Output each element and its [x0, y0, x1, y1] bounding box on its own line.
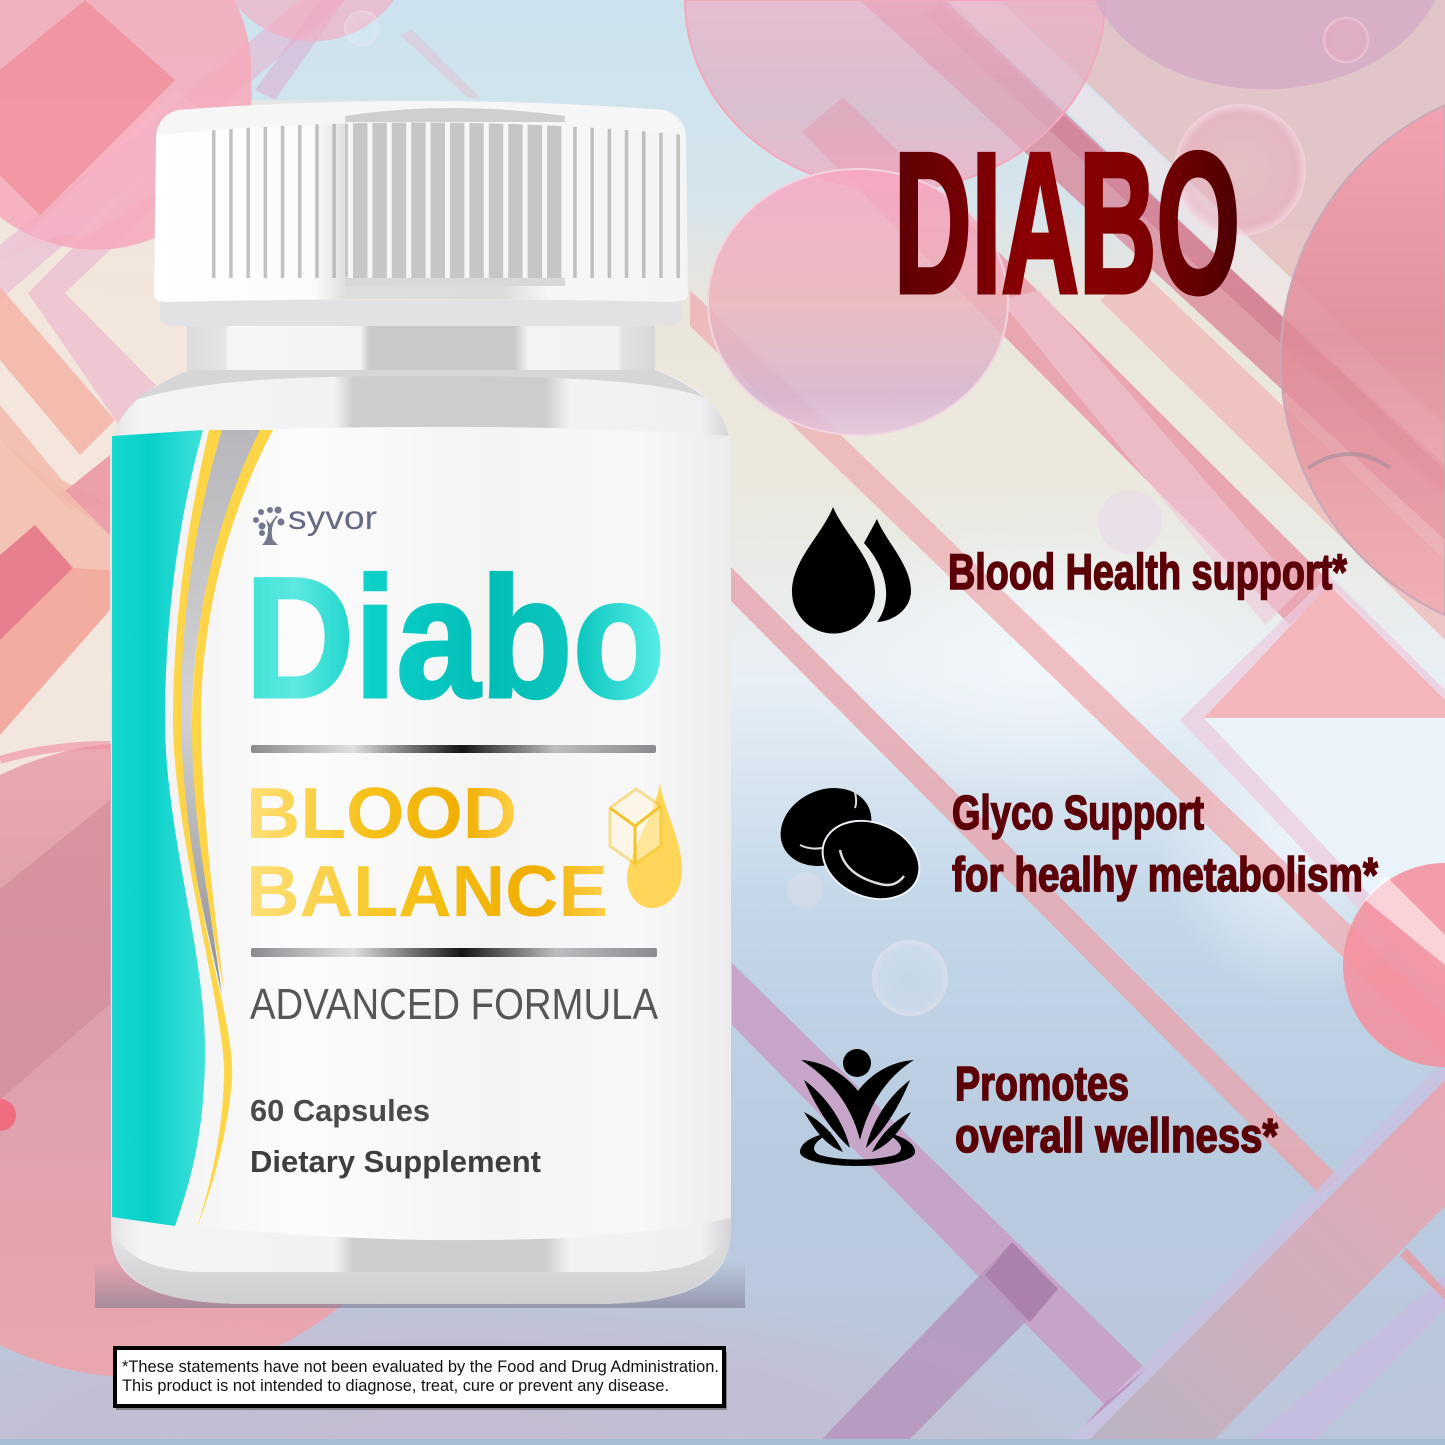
- product name: Diabo: [245, 542, 665, 734]
- product label: [112, 427, 731, 1240]
- top divider: [251, 745, 656, 753]
- bottom divider: [251, 948, 657, 957]
- disclaimer box: *These statements have not been evaluated by the Food and Drug Administration.: [122, 1358, 719, 1376]
- feature: glyco support: Glyco Support: [952, 787, 1204, 840]
- bottle body: [111, 365, 731, 1304]
- supplement type: Dietary Supplement: [250, 1144, 541, 1179]
- product bottle: [111, 101, 731, 1304]
- feature: wellness: [955, 1058, 1278, 1163]
- feature: wellness: Promotes: [955, 1058, 1129, 1111]
- bottle neck: [187, 310, 655, 370]
- icon: wellness figure: [800, 1049, 915, 1166]
- blood balance heading: BLOOD: [246, 774, 517, 854]
- brand logo: syvor: [288, 499, 377, 536]
- bottle cap: [154, 101, 688, 302]
- label teal wave: [112, 430, 205, 1226]
- subtitle: ADVANCED FORMULA: [250, 980, 659, 1029]
- disclaimer box: [115, 1348, 727, 1410]
- disclaimer box: This product is not intended to diagnose, treat, cure or prevent any disease.: [122, 1377, 669, 1395]
- label silver stripe: [180, 430, 262, 995]
- blood balance heading: BALANCE: [246, 852, 608, 932]
- bottle shadow: [95, 1262, 745, 1308]
- icon: sugar cube and drop: [610, 783, 682, 908]
- blood balance heading: [246, 774, 608, 932]
- brand logo: [253, 499, 377, 545]
- feature: wellness: overall wellness*: [955, 1110, 1278, 1163]
- bottle collar: [160, 300, 682, 326]
- icon: blood cells: [768, 774, 931, 913]
- icon: blood drops: [792, 507, 911, 633]
- feature: glyco support: [952, 787, 1378, 902]
- bottle base shading: [111, 1225, 731, 1304]
- bottle shoulder shading: [135, 365, 705, 400]
- label yellow stripes: [173, 430, 273, 1228]
- capsule count: 60 Capsules: [250, 1093, 430, 1128]
